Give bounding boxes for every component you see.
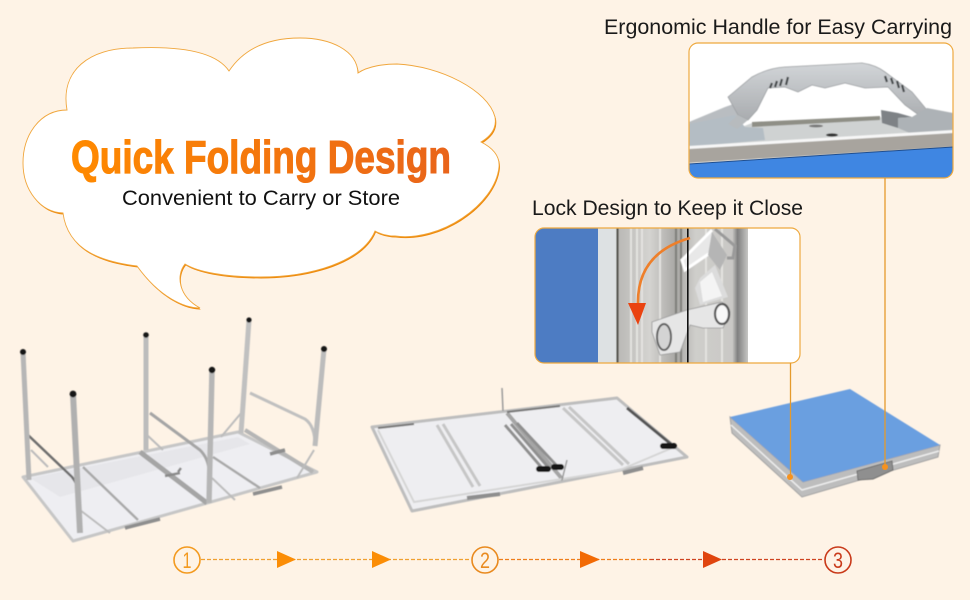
silver edge (689, 132, 953, 163)
step progress line (174, 547, 851, 573)
step 3: 3 (833, 548, 843, 573)
title: Quick Folding Design (71, 131, 451, 183)
step 2: 2 (480, 548, 490, 573)
left mount (690, 118, 765, 146)
latch bottom (652, 302, 730, 355)
table step 2: legs folded (372, 388, 687, 511)
folded legs (505, 423, 557, 468)
blue table top (689, 147, 953, 178)
panel: handle photo (689, 43, 953, 178)
label: handle: Ergonomic Handle for Easy Carrying (604, 16, 952, 39)
leg caps (20, 349, 26, 355)
pins (502, 388, 567, 480)
handles (467, 468, 643, 498)
left arm (690, 104, 738, 124)
right mount (898, 108, 953, 134)
case sides (730, 417, 940, 497)
table step 3: folded case (730, 389, 940, 497)
handles (125, 450, 285, 528)
braces (28, 435, 78, 494)
leader line: lock (787, 363, 793, 480)
cloud shape (23, 38, 499, 308)
subtitle: Convenient to Carry or Store (122, 187, 400, 210)
step 3 (825, 547, 851, 573)
metal grooves (631, 228, 722, 363)
blue top (730, 389, 940, 482)
speech cloud callout (23, 38, 500, 310)
arrows (277, 551, 296, 568)
label: lock: Lock Design to Keep it Close (532, 197, 803, 220)
panel: lock photo (535, 228, 800, 363)
cloud shadow edge (24, 40, 500, 310)
table step 1: open with legs up (20, 317, 327, 541)
step 1 (174, 547, 200, 573)
table surface (23, 432, 317, 541)
case handle (857, 461, 893, 480)
grip slots (770, 76, 904, 92)
step 2 (472, 547, 498, 573)
icon: curved arrow (628, 238, 690, 325)
step 1: 1 (182, 548, 192, 573)
handle grip (728, 63, 927, 120)
latch top (715, 229, 735, 258)
inner frame (437, 407, 629, 487)
leg caps (539, 446, 674, 469)
leader line: handle (882, 178, 888, 470)
table surface (372, 398, 687, 511)
frame bars (83, 457, 260, 520)
legs (23, 352, 29, 480)
rail (729, 116, 908, 144)
